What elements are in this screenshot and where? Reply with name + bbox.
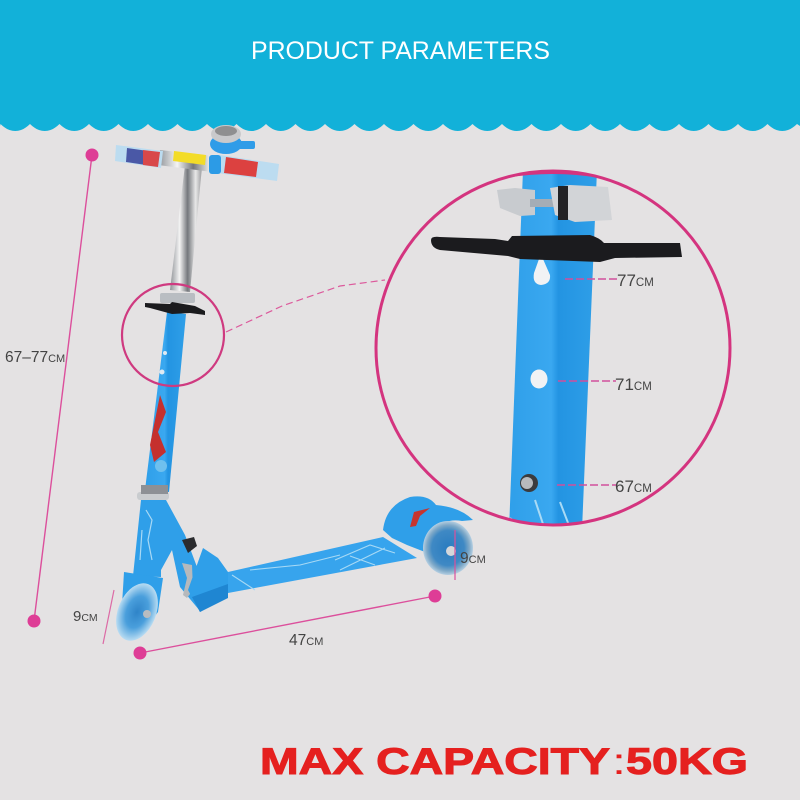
blue lower tube — [145, 312, 186, 492]
enlarged tube — [509, 170, 597, 530]
pointer lines — [557, 279, 620, 485]
max capacity banner — [260, 741, 748, 782]
bell — [210, 125, 255, 154]
title: PRODUCT PARAMETERS — [251, 37, 550, 65]
dimension: length 47cm: 47CM — [289, 632, 323, 649]
height clamp — [145, 293, 205, 315]
enlarged detail circle — [376, 170, 730, 530]
label 67cm: 67CM — [615, 477, 652, 496]
dimension: length 47cm — [134, 590, 442, 660]
max capacity banner: MAX CAPACITY — [260, 741, 610, 782]
max capacity banner: 50KG — [626, 741, 748, 782]
dimension: rear wheel 9cm — [455, 530, 486, 580]
deck — [188, 537, 417, 612]
tube graphic — [150, 395, 166, 462]
label 77cm: 77CM — [617, 271, 654, 290]
folding lever — [182, 537, 197, 598]
small magnifier circle — [122, 284, 224, 386]
dimension: overall height — [5, 148, 98, 628]
fork body — [133, 500, 228, 611]
front wheel — [108, 577, 166, 647]
scooter — [108, 125, 473, 647]
folding block — [188, 548, 228, 612]
front fork plate — [122, 572, 163, 628]
handlebar — [115, 145, 279, 181]
dimension: rear wheel 9cm: 9CM — [460, 550, 486, 567]
magnifier connector dashed line — [226, 280, 385, 332]
dimension: overall height: 67–77CM — [5, 349, 65, 366]
black collar wings — [431, 235, 682, 262]
chrome clamp — [497, 185, 612, 222]
label 71cm: 71CM — [615, 375, 652, 394]
max capacity banner: : — [612, 741, 626, 782]
ring thick top arc — [505, 170, 600, 178]
rear fender — [383, 496, 473, 552]
rear wheel — [423, 521, 473, 575]
holes — [520, 259, 550, 492]
pink ring — [376, 171, 730, 525]
dimension: front wheel 9cm — [73, 590, 114, 644]
collar — [137, 485, 169, 500]
tube graphic — [510, 500, 569, 524]
fork cracks pattern — [140, 510, 152, 560]
silver stem — [170, 165, 202, 292]
dimension: front wheel 9cm: 9CM — [73, 608, 98, 625]
fender emblem — [410, 508, 430, 527]
header banner with wavy edge — [0, 0, 800, 131]
